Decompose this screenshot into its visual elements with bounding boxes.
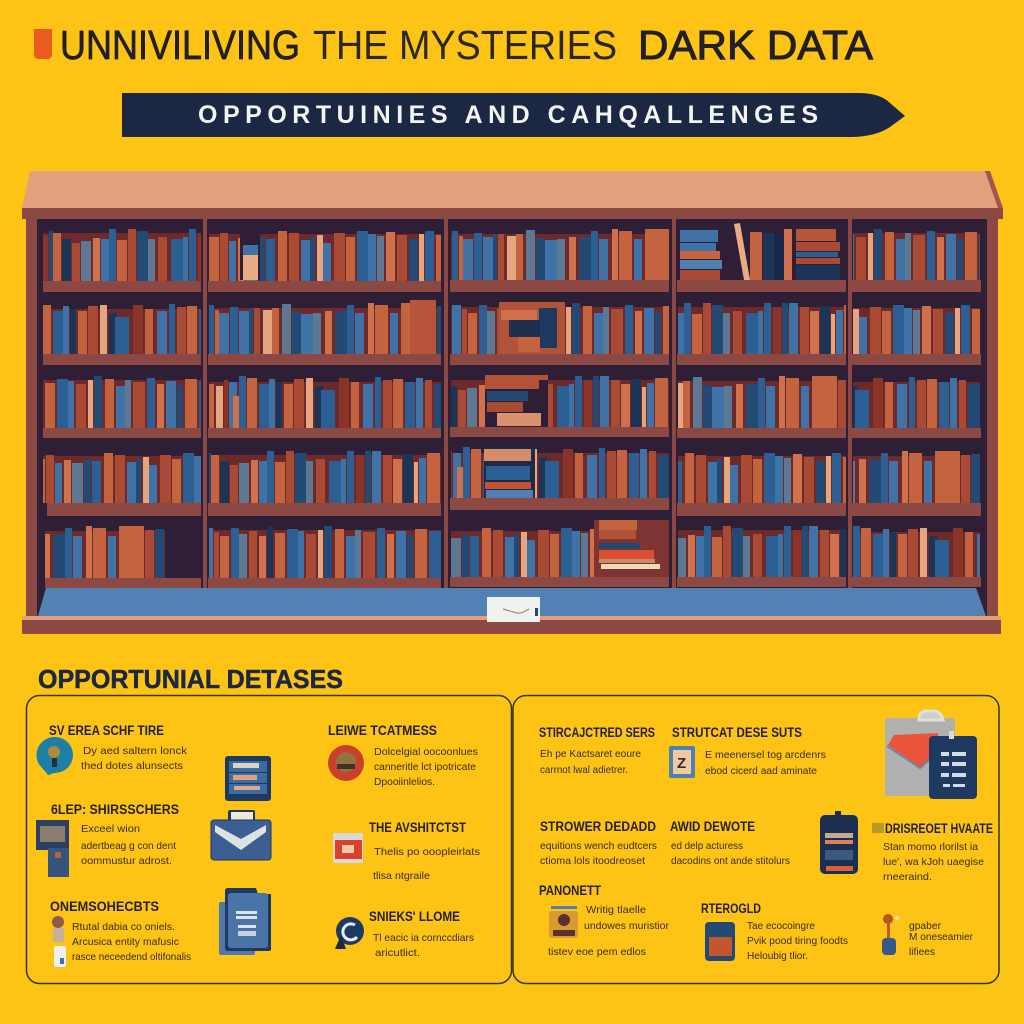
item: text 2: oommustur adrost.: [81, 855, 172, 867]
item: text F: undowes muristior: [584, 920, 669, 932]
bookshelf illustration: [0, 171, 1024, 634]
item: text C: ctioma lols itoodreoset: [540, 855, 645, 867]
shelf boards: [43, 280, 981, 588]
item: text 2: adertbeag g con dent: [81, 840, 176, 852]
icon: document stack: [219, 888, 271, 955]
item: heading C: STROWER DEDADD: [540, 819, 656, 834]
item: text 3: Rtutal dabia co oniels.: [72, 921, 175, 933]
title accent block: [34, 29, 52, 59]
item: heading G: RTEROGLD: [701, 901, 761, 916]
panel: left opportunities: [26, 696, 512, 984]
book stack: top row fourth cell: [678, 223, 846, 280]
icon: flower vase: [882, 914, 899, 955]
item: text C: [540, 840, 657, 867]
item: text 6: aricutlict.: [375, 947, 420, 959]
shelf back: [36, 219, 988, 617]
item: text 3: rasce neceedend oltifonalis: [72, 951, 191, 963]
icon: clipboard and envelope: [885, 711, 977, 799]
item: text G: Pvik pood tiring foodts: [747, 935, 848, 947]
item: text 5: [373, 846, 480, 882]
item: text H: lifiees: [909, 946, 935, 958]
title: [34, 22, 874, 68]
icon: teal globe: [36, 737, 73, 775]
item: text A: Eh pe Kactsaret eoure: [540, 748, 641, 760]
item: text G: Heloubig tlior.: [747, 950, 808, 962]
icon: gold square: [872, 823, 884, 833]
books: all cells: [0, 229, 1024, 578]
book: peach single: [240, 230, 260, 280]
book stack: fourth row third cell: [484, 447, 535, 499]
item: text G: [747, 920, 848, 962]
icon: navy loop badge: [335, 917, 364, 949]
item: text 2: Exceel wion: [81, 823, 140, 835]
item: heading F: PANONETT: [539, 883, 602, 898]
banner text: OPPORTUINIES AND CAHQALLENGES: [198, 101, 818, 129]
item: text 4: Dpooiinlelios.: [374, 776, 435, 788]
book stack: second row third cell: [499, 302, 565, 354]
item: heading 2: 6LEP: SHIRSSCHERS: [51, 802, 179, 817]
item: text 4: [374, 746, 478, 788]
item: text 1: Dy aed saltern lonck: [83, 745, 188, 757]
item: text H: gpaber: [909, 920, 941, 932]
icon: person with bottle: [52, 916, 66, 967]
panel frame: [26, 696, 512, 984]
item: text 3: [72, 921, 191, 963]
title word: the mysteries: THE MYSTERIES: [313, 22, 617, 68]
item: text F: Writig tlaelle: [586, 904, 646, 916]
icon: small book: [669, 746, 695, 778]
item: text 5: Thelis po ooopleirlats: [374, 846, 480, 858]
subtitle banner: [122, 93, 905, 137]
item: heading 1: SV EREA SCHF TIRE: [49, 723, 164, 738]
item: text E: [883, 841, 984, 883]
shelf posts: [26, 219, 998, 617]
item: text D: [671, 840, 790, 867]
item: text D: ed delp acturess: [671, 840, 743, 852]
book: large red volume: [410, 300, 436, 354]
item: text 1: [81, 745, 188, 772]
icon: red burger badge: [328, 745, 364, 781]
book stack: fifth row third cell: [594, 520, 669, 578]
item: text G: Tae ecocoingre: [747, 920, 815, 932]
item: text H: [909, 920, 973, 958]
title word: dark data: DARK DATA: [638, 22, 874, 68]
item: text E: lue', wa kJoh uaegise: [883, 856, 984, 868]
icon: navy filing document: [225, 756, 271, 801]
item: text 4: Dolcelgial oocoonlues: [374, 746, 478, 758]
title word: unniviliving: UNNIVILIVING: [60, 22, 300, 68]
item: heading 6: SNIEKS' LLOME: [369, 909, 460, 924]
blue floor: [38, 588, 986, 616]
shelf base: [22, 616, 1001, 634]
item: heading 3: ONEMSOHECBTS: [50, 899, 159, 914]
item: text D: dacodins ont ande stitolurs: [671, 855, 790, 867]
small chart card: [487, 597, 540, 622]
panel frame: [513, 696, 999, 984]
item: text 5: tlisa ntgraile: [373, 870, 430, 882]
shelf roof: [22, 171, 1003, 208]
item: text 3: Arcusica entity mafusic: [72, 936, 179, 948]
item: heading D: AWID DEWOTE: [670, 819, 755, 834]
icon: navy box: [705, 922, 735, 961]
icon: red box: [333, 833, 363, 863]
item: text F: tistev eoe pem edlos: [548, 946, 646, 958]
item: text 6: Tl eacic ia cornccdiars: [373, 932, 474, 944]
item: text 2: [81, 823, 176, 867]
item: text 1: thed dotes alunsects: [81, 760, 183, 772]
item: text E: Stan momo rlorilst ia: [883, 841, 978, 853]
item: text 6: [373, 932, 474, 959]
item: text A: [540, 748, 641, 776]
item: heading E: DRISREOET HVAATE: [885, 821, 993, 836]
item: text A: carrnot lwal adietrer.: [540, 764, 628, 776]
item: heading B: STRUTCAT DESE SUTS: [672, 725, 802, 740]
item: heading 5: THE AVSHITCTST: [369, 820, 467, 835]
section heading: OPPORTUNIAL DETASES: [38, 664, 343, 694]
item: text H: M oneseamier: [909, 931, 973, 943]
item: text F: [548, 904, 669, 958]
icon: framed portrait: [549, 906, 578, 938]
item: text B: [705, 749, 826, 777]
item: text B: ebod cicerd aad aminate: [705, 765, 817, 777]
item: heading A: STIRCAJCTRED SERS: [539, 725, 655, 740]
item: text B: E meenersel tog arcdenrs: [705, 749, 826, 761]
panel: right opportunities: [513, 696, 999, 984]
icon: envelope: [211, 810, 271, 860]
icon: card reader: [36, 820, 69, 877]
item: text C: equitions wench eudtcers: [540, 840, 657, 852]
banner shape: [122, 93, 905, 137]
icon: small book: Z: [677, 755, 686, 772]
icon: navy tablet: [820, 811, 858, 874]
item: heading 4: LEIWE TCATMESS: [328, 723, 437, 738]
item: text E: rneeraind.: [883, 871, 932, 883]
item: text 4: canneritle lct ipotricate: [374, 761, 476, 773]
book stack: third row third cell: [485, 375, 548, 428]
